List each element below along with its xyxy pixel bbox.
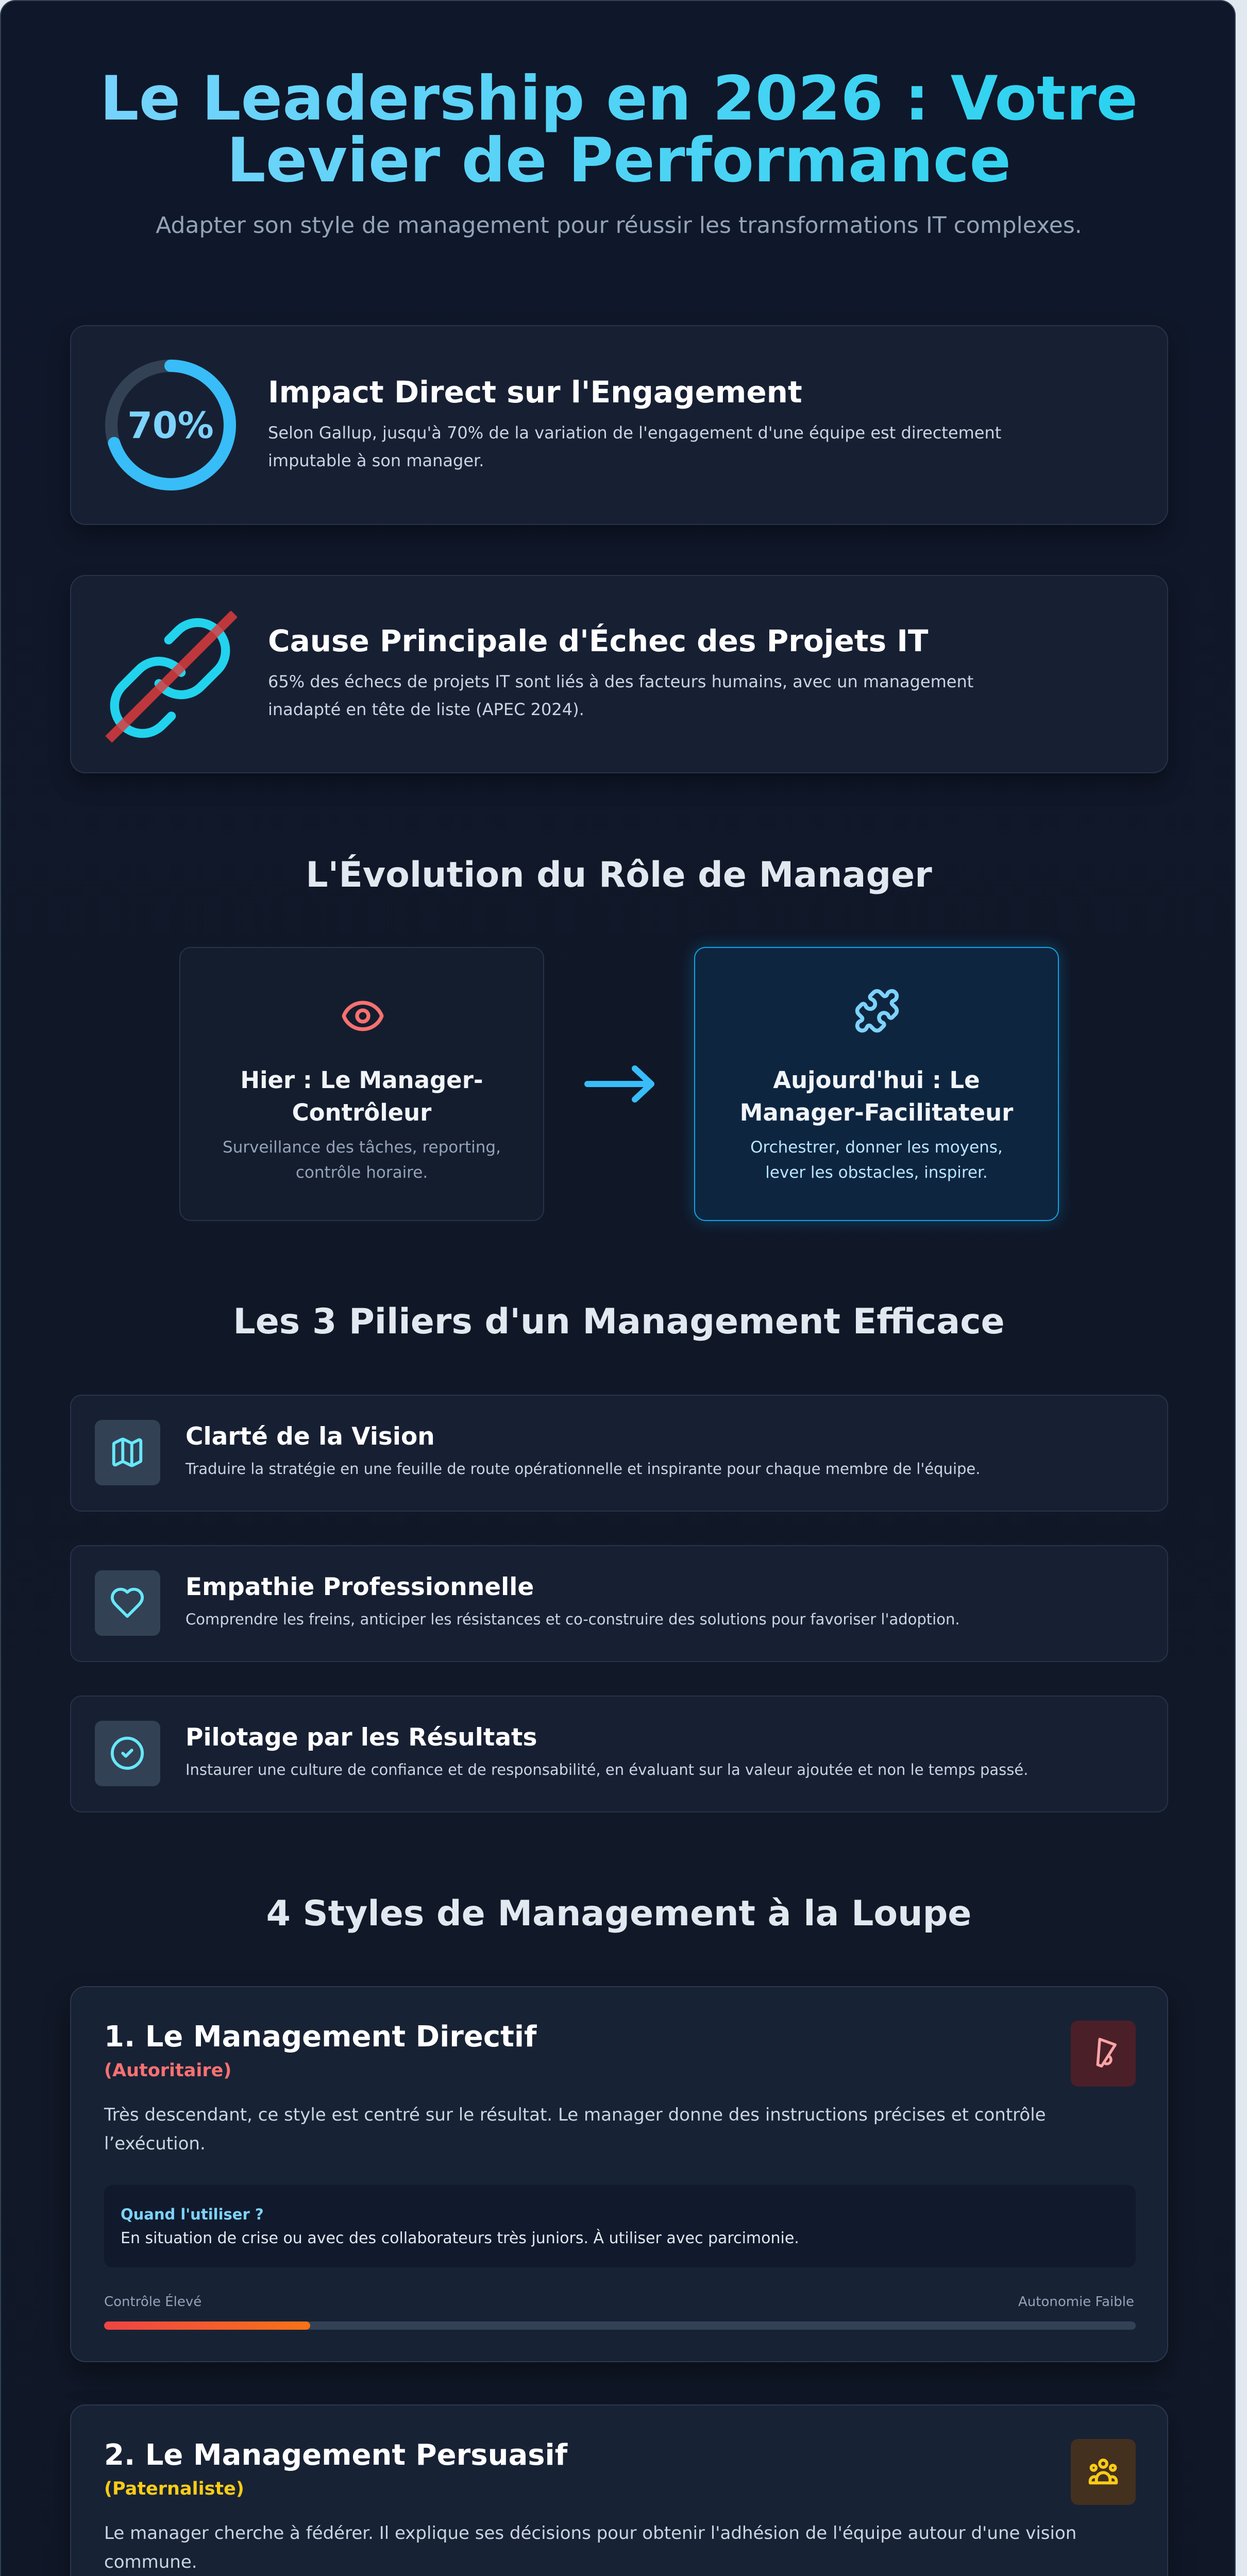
panel: style persuasif: commune. bbox=[104, 2552, 197, 2572]
panel: style persuasif bbox=[70, 2404, 1168, 2576]
icon: ring 70%: 70% bbox=[127, 404, 214, 447]
text: aujourd'hui: Manager-Facilitateur bbox=[740, 1099, 1013, 1126]
icon: megaphone bbox=[1071, 2021, 1136, 2087]
icon: ring 70% bbox=[105, 360, 236, 490]
heading: Cause Principale d'Échec des Projets IT bbox=[268, 623, 928, 658]
panel: style directif bbox=[70, 1986, 1168, 2362]
callout: quand: Quand l'utiliser ? bbox=[121, 2206, 264, 2223]
text: Pilotage par les Résultats bbox=[186, 1723, 537, 1752]
panel: pilier pilotage: Instaurer une culture de confiance et de responsabilité, en évaluant sur la valeur ajoutée et non le temps passé. bbox=[186, 1761, 1028, 1778]
text bbox=[268, 423, 1001, 470]
heading: piliers: Les 3 Piliers d'un Management Efficace bbox=[233, 1301, 1005, 1342]
panel: style directif: Contrôle Élevé bbox=[104, 2294, 201, 2310]
icon: broken link bbox=[105, 611, 237, 743]
text: hier: Hier : Le Manager- bbox=[240, 1066, 483, 1094]
bar bbox=[104, 2321, 1136, 2330]
panel: pilier pilotage bbox=[70, 1696, 1168, 1812]
panel: style persuasif: Le manager cherche à fédérer. Il explique ses décisions pour obtenir l'adhésion de l'équipe autour d'une vision bbox=[104, 2523, 1076, 2544]
icon: heart bbox=[95, 1570, 160, 1636]
title: Levier de Performance bbox=[227, 125, 1011, 196]
panel: stat engagement bbox=[70, 325, 1168, 525]
panel: aujourd'hui bbox=[694, 947, 1059, 1221]
panel: pilier vision bbox=[70, 1395, 1168, 1512]
panel: pilier empathie: Comprendre les freins, anticiper les résistances et co-construire des solutions pour favoriser l'adoption. bbox=[186, 1611, 960, 1628]
text: Clarté de la Vision bbox=[186, 1422, 435, 1451]
panel: pilier empathie bbox=[70, 1545, 1168, 1662]
panel: style persuasif: 2. Le Management Persuasif bbox=[104, 2438, 567, 2472]
heading: Impact Direct sur l'Engagement bbox=[268, 375, 802, 410]
text: 65% des échecs de projets IT sont liés à des facteurs humains, avec un management bbox=[268, 672, 973, 691]
text: aujourd'hui bbox=[740, 1066, 1013, 1182]
panel: stat failure bbox=[70, 575, 1168, 773]
callout: quand bbox=[104, 2185, 1136, 2267]
text: Empathie Professionnelle bbox=[186, 1573, 534, 1601]
panel: style directif: (Autoritaire) bbox=[104, 2060, 231, 2081]
text: inadapté en tête de liste (APEC 2024). bbox=[268, 700, 584, 719]
icon: eye bbox=[342, 1001, 383, 1031]
text bbox=[268, 672, 973, 719]
arrow bbox=[584, 1065, 654, 1103]
panel: style persuasif: (Paternaliste) bbox=[104, 2479, 244, 2499]
text: aujourd'hui: lever les obstacles, inspirer. bbox=[765, 1163, 988, 1182]
text: aujourd'hui: Aujourd'hui : Le bbox=[773, 1066, 980, 1094]
subtitle: Adapter son style de management pour réussir les transformations IT complexes. bbox=[156, 212, 1082, 239]
text: Selon Gallup, jusqu'à 70% de la variation de l'engagement d'une équipe est directement bbox=[268, 423, 1001, 443]
title: Le Leadership en 2026 : Votre bbox=[100, 63, 1138, 134]
callout: quand: En situation de crise ou avec des collaborateurs très juniors. À utiliser avec parcimonie. bbox=[121, 2229, 799, 2247]
panel: pilier vision: Traduire la stratégie en une feuille de route opérationnelle et inspirante pour chaque membre de l'équipe. bbox=[186, 1460, 980, 1478]
panel: style directif: Autonomie Faible bbox=[1018, 2294, 1134, 2310]
icon: group bbox=[1071, 2439, 1136, 2505]
title bbox=[1, 68, 1237, 192]
icon: map bbox=[95, 1420, 160, 1485]
icon: puzzle bbox=[855, 989, 899, 1032]
panel: style directif: l’exécution. bbox=[104, 2133, 206, 2154]
heading: evolution: L'Évolution du Rôle de Manager bbox=[306, 855, 932, 895]
panel: hier bbox=[179, 947, 544, 1221]
text: hier: Surveillance des tâches, reporting, bbox=[223, 1138, 501, 1157]
panel: style directif: 1. Le Management Directif bbox=[104, 2020, 536, 2054]
panel: style directif: Très descendant, ce style est centré sur le résultat. Le manager donne des instructions précises et contrôle bbox=[104, 2105, 1046, 2125]
text: hier: contrôle horaire. bbox=[296, 1163, 428, 1182]
text: imputable à son manager. bbox=[268, 451, 484, 470]
text: aujourd'hui: Orchestrer, donner les moyens, bbox=[750, 1138, 1003, 1157]
text: hier: Contrôleur bbox=[292, 1099, 431, 1126]
text: hier bbox=[223, 1066, 501, 1182]
icon: check circle bbox=[95, 1721, 160, 1786]
heading: styles: 4 Styles de Management à la Loupe bbox=[266, 1893, 971, 1934]
